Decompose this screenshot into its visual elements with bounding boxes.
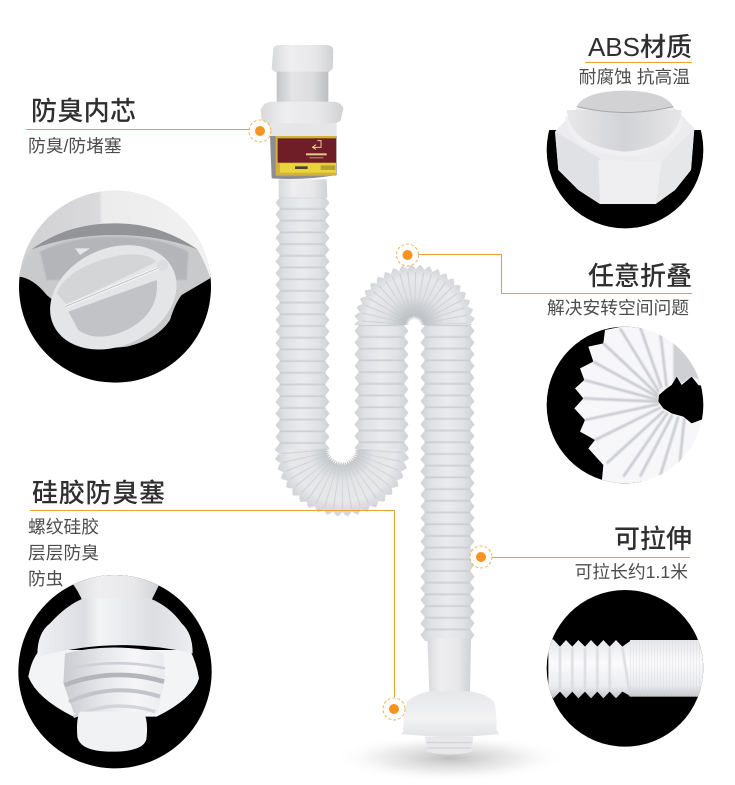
stretched fine-rib section (630, 640, 705, 697)
left straight hose section (274, 197, 332, 449)
inner shadow crescent (32, 223, 197, 249)
heading: silicone odor plug: 硅胶防臭塞 (32, 478, 165, 508)
wide hex nut (261, 102, 343, 124)
product: flexible drain hose (274, 197, 476, 641)
dome (20, 190, 210, 278)
subtext: foldable: 解决安转空间问题 (547, 298, 689, 318)
heading: odor core: 防臭内芯 (31, 96, 136, 126)
flap upper half (57, 254, 157, 305)
product: top fitting with label (261, 45, 343, 198)
subtext: odor core: 防臭/防堵塞 (28, 136, 122, 156)
pleat fold lines (583, 327, 684, 477)
plug flange (28, 650, 199, 717)
panel: odor core detail circle (19, 190, 211, 383)
U bend of hose (302, 449, 382, 489)
black lower background (546, 130, 704, 228)
callout leader lines (26, 62, 692, 697)
arch of hose (382, 292, 448, 325)
top hex nut (272, 45, 333, 73)
flap bar (65, 266, 163, 307)
subtext: silicone plug features: 防虫 (28, 569, 64, 589)
inner cylinder (40, 237, 188, 280)
plug tip (77, 712, 147, 752)
panel: stretch detail circle (547, 590, 705, 747)
collar (269, 123, 337, 137)
top disc (577, 91, 673, 112)
plug top neck (73, 575, 159, 600)
neck (427, 638, 471, 692)
threaded outlet (279, 179, 327, 198)
pleated fan (574, 326, 642, 484)
collar ring (565, 116, 568, 120)
neck (277, 72, 328, 103)
plug thread stack (63, 647, 165, 752)
compressed corrugated section (548, 639, 632, 698)
nut left face (555, 132, 600, 204)
plug dome (37, 598, 193, 657)
nut silhouette (555, 107, 694, 204)
corrugation folds (560, 647, 630, 696)
subtext: silicone plug features: 层层防臭 (28, 543, 99, 563)
hotspot: fold (396, 244, 418, 266)
hose opening (658, 377, 705, 423)
subtext: silicone plug features: 螺纹硅胶 (28, 517, 99, 537)
middle straight hose section (352, 325, 410, 449)
hotspot: odor core (249, 120, 271, 142)
interior of the dome (20, 190, 210, 348)
label body (270, 136, 337, 179)
shaded pleat at upper right (672, 344, 699, 384)
panel: folding detail circle (546, 326, 704, 484)
heading: foldable: 任意折叠 (588, 261, 692, 291)
nut right face (656, 128, 694, 204)
product drop shadow (332, 734, 568, 782)
panel: silicone plug detail circle (18, 573, 212, 768)
flap rim (50, 245, 176, 350)
right straight hose section (418, 325, 476, 641)
product: bottom neck, base and thread (401, 638, 499, 754)
heading: stretchable: 可拉伸 (614, 524, 692, 554)
black lower background (19, 270, 211, 383)
heading: ABS material: ABS材质 (588, 32, 692, 62)
black left background (546, 326, 642, 484)
nut front face (598, 160, 656, 204)
subtext: ABS: 耐腐蚀 抗高温 (579, 67, 690, 87)
base bowl (401, 691, 499, 737)
hotspot: stretch (470, 546, 492, 568)
red and yellow product label (276, 136, 336, 176)
base thread (425, 737, 473, 754)
panel: ABS material detail circle (546, 90, 704, 228)
subtext: silicone plug features (28, 517, 99, 589)
hotspot: silicone plug (383, 698, 405, 720)
flap lower half (68, 280, 157, 337)
flap hinge (158, 264, 164, 270)
subtext: stretchable: 可拉长约1.1米 (575, 562, 688, 582)
